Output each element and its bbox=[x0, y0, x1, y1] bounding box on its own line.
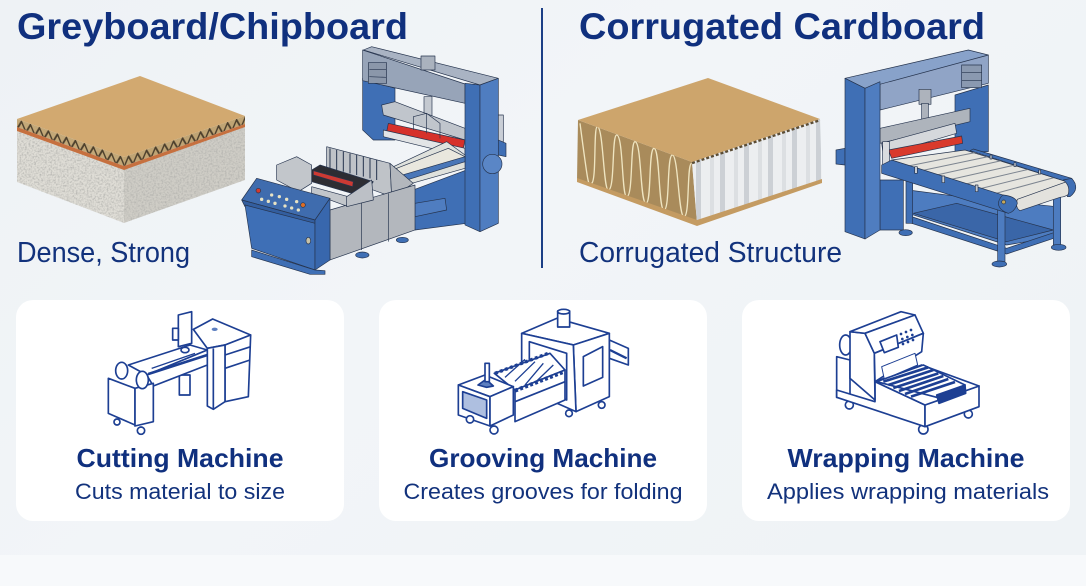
comb unit bbox=[327, 147, 392, 197]
machine base behind the feed table bbox=[413, 170, 467, 230]
divider bbox=[541, 8, 543, 268]
title: Greyboard/Chipboard: Greyboard/Chipboard bbox=[17, 6, 408, 47]
card description: Applies wrapping materials bbox=[767, 479, 1049, 504]
title: Corrugated Cardboard: Corrugated Cardboard bbox=[579, 6, 985, 47]
label: Corrugated Structure: Corrugated Structure bbox=[579, 237, 842, 269]
feed table bbox=[390, 142, 465, 187]
icon: wrapping machine bbox=[837, 312, 979, 434]
card heading: Grooving Machine bbox=[429, 443, 657, 473]
card: Cutting Machine bbox=[16, 300, 344, 521]
conveyor belt bbox=[892, 150, 1067, 207]
card: Wrapping Machine bbox=[742, 300, 1070, 521]
illustration: corrugated board sample bbox=[577, 78, 822, 226]
card: Grooving Machine bbox=[379, 300, 707, 521]
illustration: greyboard sample bbox=[17, 76, 247, 225]
card description: Creates grooves for folding bbox=[404, 479, 682, 504]
blue console bbox=[242, 178, 330, 220]
illustration: greyboard cutting press bbox=[242, 47, 506, 274]
conveyor frame bbox=[908, 190, 1057, 245]
card heading: Wrapping Machine bbox=[788, 443, 1024, 473]
card heading: Cutting Machine bbox=[76, 443, 284, 473]
label: Dense, Strong: Dense, Strong bbox=[17, 237, 190, 269]
icon: grooving machine bbox=[458, 309, 628, 434]
card description: Cuts material to size bbox=[75, 479, 285, 504]
icon: cutting machine bbox=[108, 312, 251, 434]
grey cabinet bbox=[330, 185, 415, 260]
illustration: corrugated cutting press with conveyor bbox=[836, 50, 1076, 267]
